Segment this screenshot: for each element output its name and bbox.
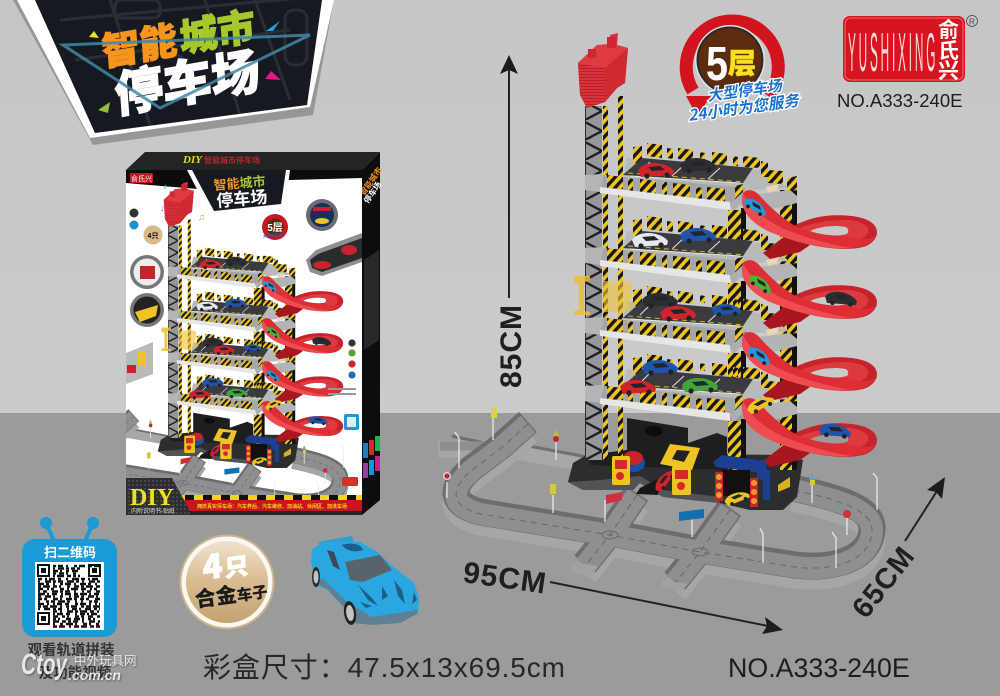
badge heading: floors: 层 xyxy=(728,42,756,82)
box music note icons xyxy=(160,181,205,222)
width arrow xyxy=(550,582,783,634)
box bottom caution band xyxy=(126,495,362,515)
top crane head xyxy=(578,33,628,108)
badge label: 合金车子 xyxy=(193,574,269,614)
box title banner xyxy=(187,170,290,216)
gold 1 metre marker xyxy=(574,276,632,315)
box right side: 停车场 xyxy=(361,180,383,205)
box logo: 俞氏兴 xyxy=(131,174,152,183)
width label: 95CM xyxy=(461,556,549,601)
watermark xyxy=(21,648,137,683)
box small badge: 5 floors: 5层 xyxy=(267,222,283,234)
badge count: 4只 xyxy=(202,536,249,590)
box inset panel xyxy=(126,342,153,384)
road signs and street lamps xyxy=(443,408,877,568)
product box xyxy=(126,152,382,515)
box scene: miniature parking tower and tracks xyxy=(126,182,348,496)
red spiral ramp 3 xyxy=(742,332,877,401)
box music note icons: ♫ xyxy=(160,203,167,213)
box title banner: 智能城市 xyxy=(213,174,266,193)
rear support post xyxy=(780,190,797,470)
main product: parking tower with roads xyxy=(438,33,877,592)
brand logo: 俞 xyxy=(938,18,959,42)
box title banner: 停车场 xyxy=(216,187,268,211)
QR antennae xyxy=(40,517,99,541)
height label: 85CM xyxy=(495,304,528,388)
brand logo xyxy=(843,16,978,83)
cars on the floors xyxy=(620,158,741,396)
parking floor 2 xyxy=(585,216,797,337)
box logo xyxy=(130,173,153,183)
background floor xyxy=(0,413,1000,696)
watermark: 中外玩具网 xyxy=(74,653,137,668)
red spiral ramp 1 xyxy=(742,190,877,259)
background wall xyxy=(0,0,1000,413)
registered mark: R xyxy=(969,16,975,26)
height arrow xyxy=(500,55,518,298)
road track xyxy=(438,422,872,592)
box bottom caution band: 拥挤真实停车场：汽车养后、汽车维修、加油站、休闲区、加洗车场 xyxy=(197,503,347,510)
box top text: DIY智能城市停车场 xyxy=(182,154,260,166)
box DIY label: DIY xyxy=(130,485,174,511)
depth arrow xyxy=(905,477,945,541)
title banner xyxy=(13,0,334,145)
brand logo: 氏 xyxy=(938,40,959,63)
badge caption: 24小时为您服务 xyxy=(687,88,801,126)
parking floor 4 xyxy=(585,354,797,475)
box DIY label: 内附说明书-贴纸 xyxy=(131,507,175,515)
QR heading: 扫二维码 xyxy=(44,545,96,560)
cars on the ramps xyxy=(742,195,858,440)
car wash station xyxy=(713,455,790,508)
box small badge: 5 floors xyxy=(262,214,288,240)
brand logo: 兴 xyxy=(938,60,959,83)
QR caption: 观看轨道拼装 xyxy=(28,641,115,659)
box left feature circles: 4只 xyxy=(148,232,158,240)
box right feature circle and capsule xyxy=(306,199,362,276)
fuel pumps and lift xyxy=(612,444,700,495)
brand logo: YUSHIXING xyxy=(848,23,935,83)
badge: 5 floors xyxy=(686,21,801,126)
box right icons and QR xyxy=(328,339,359,486)
banner triangle outline xyxy=(63,35,310,108)
watermark: Ctoy xyxy=(21,648,68,681)
model number bottom: NO.A333-240E xyxy=(728,653,910,683)
left lattice column xyxy=(585,96,623,460)
tower ground platform xyxy=(568,418,803,510)
box top face xyxy=(126,152,380,170)
box music note icons: ♫ xyxy=(198,212,205,222)
red spiral ramp 2 xyxy=(742,260,877,329)
banner heading: 停车场: 停车场 xyxy=(112,31,262,128)
QR caption line two: 及功能视频 xyxy=(39,664,112,682)
box left feature circles xyxy=(130,208,164,327)
badge ring and arrow xyxy=(686,21,778,116)
parking floor 1 xyxy=(585,143,797,264)
banner accent triangles xyxy=(89,21,281,113)
box music note icons: ♪ xyxy=(163,181,168,191)
box DIY label xyxy=(126,478,190,515)
depth label: 65CM xyxy=(846,540,922,624)
QR panel xyxy=(22,539,117,637)
box small badge: 5 floors: 大型停车场 xyxy=(262,231,283,239)
box right side: 智能城市 xyxy=(357,165,384,197)
model number top: NO.A333-240E xyxy=(837,90,962,111)
box front face xyxy=(126,170,362,515)
badge caption: 大型停车场 xyxy=(706,74,785,106)
red spiral ramp 4 xyxy=(742,398,877,467)
watermark: .com.cn xyxy=(68,667,121,683)
QR code xyxy=(35,562,104,630)
badge heading: 5 xyxy=(706,38,728,91)
blue alloy car xyxy=(312,536,418,626)
parking floor 3 xyxy=(585,286,797,407)
box right side xyxy=(357,152,384,515)
QR code block xyxy=(22,517,117,637)
box size text: 彩盒尺寸：47.5x13x69.5cm xyxy=(203,652,565,683)
badge: 4 alloy cars xyxy=(180,536,274,628)
